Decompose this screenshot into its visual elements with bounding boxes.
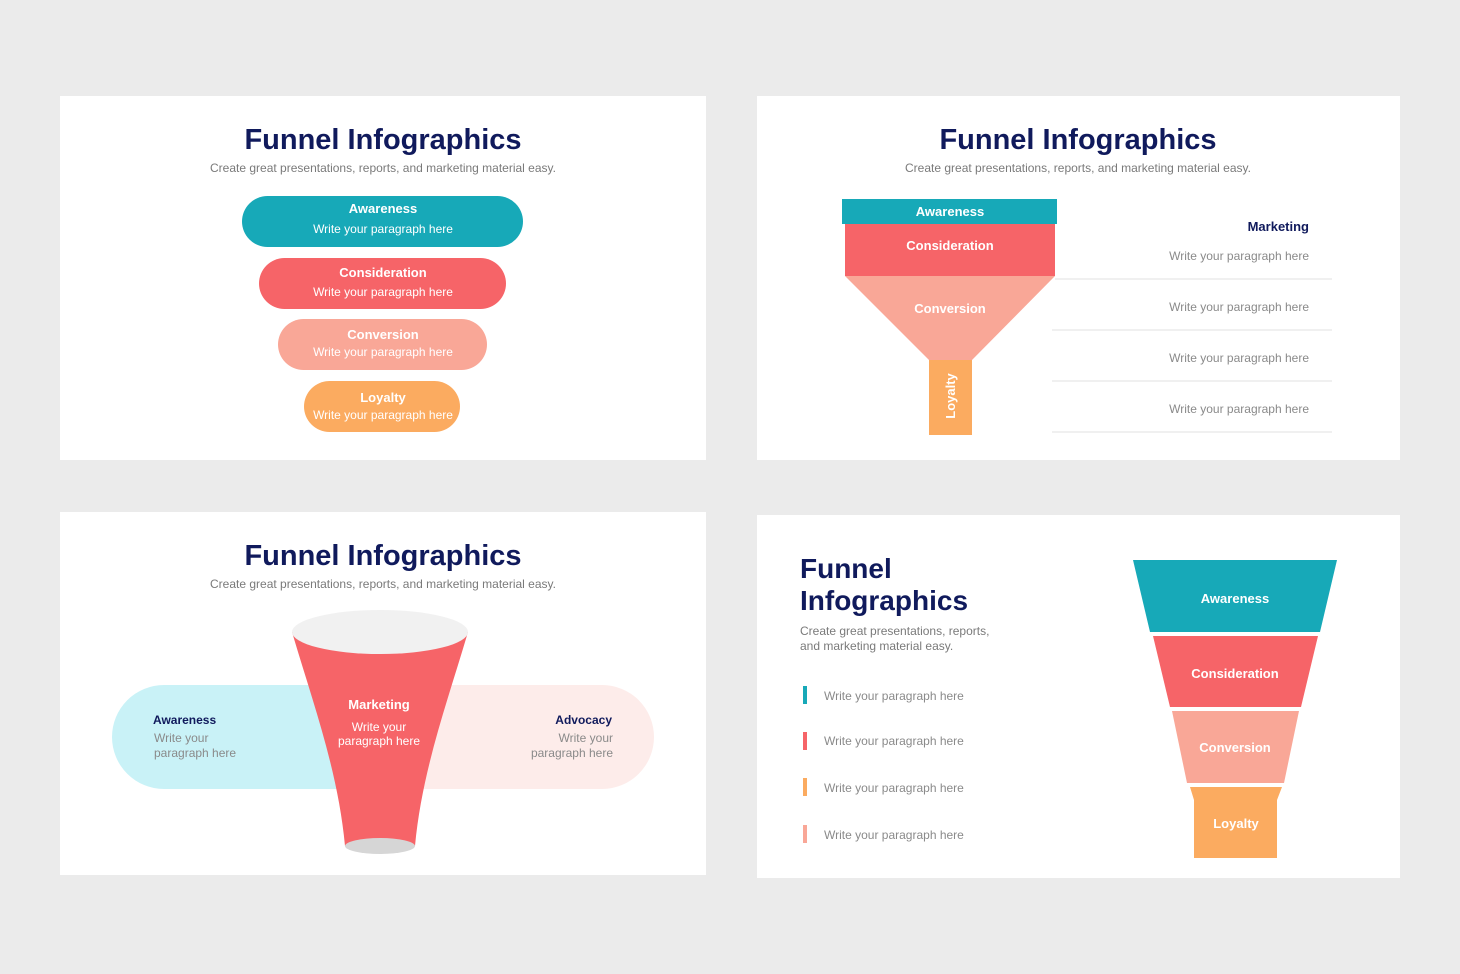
cone: Marketing (348, 697, 410, 712)
pill: consideration (259, 258, 506, 309)
pill: awareness: Write your paragraph here (313, 222, 453, 236)
pill: advocacy right (360, 685, 654, 789)
text list: Write your paragraph here (1169, 351, 1309, 365)
pill: awareness left (112, 685, 412, 789)
funnel stack (1133, 560, 1337, 858)
funnel stack: Loyalty (1213, 816, 1260, 831)
pill: awareness (242, 196, 523, 247)
pill: conversion (278, 319, 487, 370)
pill: awareness: Awareness (349, 201, 417, 216)
panel: funnel with lines (757, 96, 1400, 460)
funnel stack: Awareness (1201, 591, 1269, 606)
subtitle: Create great presentations, reports, (800, 624, 989, 638)
text list: Marketing (1248, 219, 1309, 234)
pill: loyalty: Loyalty (360, 390, 407, 405)
funnel shape (842, 199, 1057, 435)
pill: conversion: Conversion (347, 327, 419, 342)
bullet list (803, 686, 964, 843)
panel: cone funnel (60, 512, 706, 875)
title: Funnel (800, 553, 892, 584)
text list (1052, 219, 1332, 432)
funnel shape: Loyalty (943, 372, 958, 419)
text list: Write your paragraph here (1169, 300, 1309, 314)
pill: awareness left: Awareness (153, 713, 216, 727)
pill: loyalty (304, 381, 460, 432)
funnel stack: Consideration (1191, 666, 1279, 681)
bullet list: Write your paragraph here (824, 828, 964, 842)
panel: trapezoid funnel (757, 515, 1400, 878)
text list: Write your paragraph here (1169, 249, 1309, 263)
title: Funnel Infographics (244, 124, 522, 156)
panel: trapezoid funnel: and marketing material easy. (800, 639, 953, 653)
cone: Write your (352, 720, 406, 734)
subtitle: Create great presentations, reports, and marketing material easy. (210, 161, 556, 175)
pill: loyalty: Write your paragraph here (313, 408, 453, 422)
funnel shape: Conversion (914, 301, 986, 316)
pill: advocacy right: Advocacy (555, 713, 612, 727)
funnel shape: Awareness (916, 204, 984, 219)
cone (292, 610, 468, 854)
text list: Write your paragraph here (1169, 402, 1309, 416)
pill: awareness left: Write your (154, 731, 208, 745)
panel: trapezoid funnel: Infographics (800, 585, 968, 616)
funnel shape: Consideration (906, 238, 994, 253)
pill: consideration: Write your paragraph here (313, 285, 453, 299)
pill: conversion: Write your paragraph here (313, 345, 453, 359)
pill: awareness left: paragraph here (154, 746, 236, 760)
title: Funnel Infographics (939, 124, 1217, 156)
pill: advocacy right: paragraph here (531, 746, 613, 760)
subtitle: Create great presentations, reports, and marketing material easy. (210, 577, 556, 591)
panel: pill funnel (60, 96, 706, 460)
cone: paragraph here (338, 734, 420, 748)
bullet list: Write your paragraph here (824, 734, 964, 748)
pill: consideration: Consideration (339, 265, 427, 280)
bullet list: Write your paragraph here (824, 781, 964, 795)
title: Funnel Infographics (244, 540, 522, 572)
subtitle: Create great presentations, reports, and marketing material easy. (905, 161, 1251, 175)
pill: advocacy right: Write your (559, 731, 613, 745)
bullet list: Write your paragraph here (824, 689, 964, 703)
funnel stack: Conversion (1199, 740, 1271, 755)
